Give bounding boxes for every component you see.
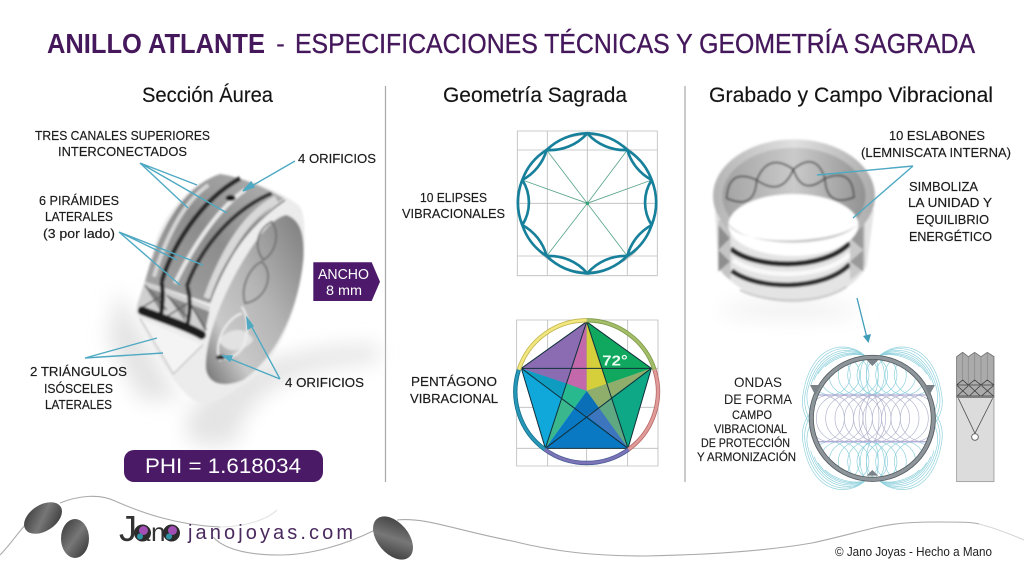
copyright: © Jano Joyas - Hecho a Mano — [835, 545, 992, 559]
diagram: ring profile — [957, 352, 994, 482]
labels: ondas de forma: DE FORMA — [724, 391, 793, 407]
ring photo: side view with grooves and pyramids — [135, 174, 305, 403]
heading: Grabado y Campo Vibracional: Grabado y Campo Vibracional — [709, 84, 993, 107]
stones — [18, 496, 421, 567]
labels: side ring: 4 ORIFICIOS — [285, 375, 364, 390]
title: ANILLO ATLANTE — [47, 28, 265, 59]
footer swoosh lines — [0, 496, 1024, 556]
labels: side ring: LATERALES — [45, 397, 112, 412]
labels: side ring — [30, 128, 376, 412]
callout: ancho 8 mm — [313, 262, 380, 301]
diagram: coloured vibrational pentagon: 72° — [602, 353, 628, 369]
logo: Jano: a — [136, 517, 151, 547]
callout leaders: side ring — [85, 161, 295, 379]
labels: inner ring: (LEMNISCATA INTERNA) — [861, 145, 1011, 160]
label: 10 elipses — [402, 190, 505, 221]
callout leaders: inner ring — [817, 166, 913, 218]
ring shadow — [108, 290, 860, 445]
diagram: 10 ellipses on grid — [517, 131, 657, 276]
callout: ancho 8 mm: ANCHO — [318, 267, 369, 283]
labels: ondas de forma: Y ARMONIZACIÓN — [697, 451, 796, 464]
labels: side ring: LATERALES — [45, 209, 113, 224]
labels: side ring: 4 ORIFICIOS — [298, 151, 376, 166]
label: pentagono: VIBRACIONAL — [410, 391, 498, 406]
labels: ondas de forma: VIBRACIONAL — [714, 424, 788, 436]
label: 10 elipses: VIBRACIONALES — [402, 206, 505, 221]
labels: inner ring: ENERGÉTICO — [909, 229, 992, 244]
labels: ondas de forma — [697, 374, 796, 464]
labels: inner ring — [861, 128, 1011, 244]
labels: side ring: INTERCONECTADOS — [58, 144, 187, 159]
labels: ondas de forma: CAMPO — [732, 410, 772, 422]
callout: PHI value: PHI = 1.618034 — [145, 455, 301, 478]
title — [47, 28, 975, 59]
labels: inner ring: EQUILIBRIO — [916, 212, 989, 227]
callout: PHI value — [124, 450, 323, 482]
labels: side ring: 6 PIRÁMIDES — [39, 193, 119, 208]
title: - — [276, 28, 285, 59]
logo: Jano — [119, 508, 180, 549]
labels: side ring: (3 por lado) — [43, 226, 115, 241]
diagram: coloured vibrational pentagon — [515, 320, 658, 466]
diagram: vibrational field waves — [798, 347, 947, 490]
labels: side ring: TRES CANALES SUPERIORES — [35, 128, 210, 143]
logo: Jano: J — [119, 508, 137, 549]
website: janojoyas.com — [187, 522, 353, 544]
labels: inner ring: 10 ESLABONES — [889, 128, 985, 143]
arrow: ring to waves — [857, 298, 871, 343]
labels: ondas de forma: DE PROTECCIÓN — [701, 437, 790, 450]
label: pentagono — [410, 374, 498, 406]
label: 10 elipses: 10 ELIPSES — [420, 190, 487, 205]
ring photo: inner view with lemniscate links — [713, 139, 875, 303]
labels: side ring: 2 TRIÁNGULOS — [30, 364, 127, 379]
callout: ancho 8 mm: 8 mm — [326, 283, 362, 298]
heading: Sección Áurea: Sección Áurea — [142, 84, 273, 107]
labels: side ring: ISÓSCELES — [44, 381, 113, 396]
logo: Jano: o — [165, 517, 179, 547]
heading: Geometría Sagrada: Geometría Sagrada — [443, 84, 627, 107]
logo: Jano: n — [151, 517, 165, 547]
label: pentagono: PENTÁGONO — [411, 374, 497, 389]
labels: inner ring: SIMBOLIZA — [909, 179, 978, 194]
labels: ondas de forma: ONDAS — [734, 374, 782, 390]
labels: inner ring: LA UNIDAD Y — [908, 195, 992, 210]
